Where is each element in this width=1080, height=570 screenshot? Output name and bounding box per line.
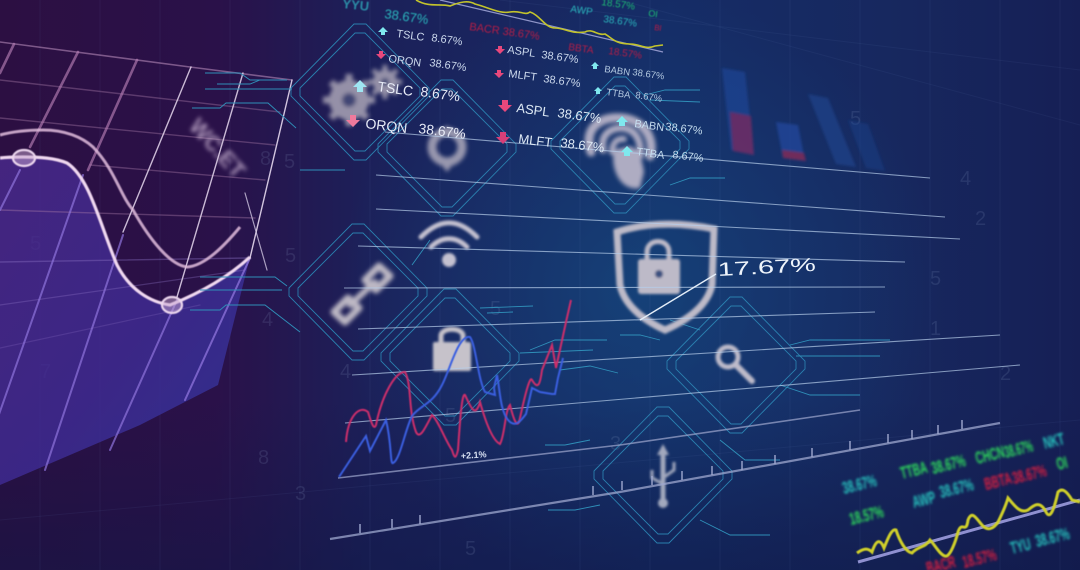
faint background digits: 5 xyxy=(445,405,456,427)
stock list: rear right rows: TTBA xyxy=(606,87,632,101)
stock list: foreground left xyxy=(346,78,467,142)
faint background digits: 1 xyxy=(930,318,941,340)
stock list: foreground left: 38.67% xyxy=(418,120,467,142)
faint background digits: 8 xyxy=(258,447,269,469)
stock list: top edge row: AWP xyxy=(570,4,594,18)
faint background digits: 4 xyxy=(262,309,273,331)
green tickers: OI xyxy=(1054,452,1069,474)
stock list: rear rows: TSLC xyxy=(396,28,425,44)
stock list: foreground centre xyxy=(496,100,606,155)
stock list: rear rows: ASPL xyxy=(507,44,536,60)
icon: magnifier xyxy=(718,347,752,381)
teal tickers: AWP xyxy=(910,487,937,512)
axis: lower white baseline with ticks xyxy=(330,410,1000,539)
teal tickers: 38.67% xyxy=(840,470,879,498)
stock list: rear rows: MLFT xyxy=(508,68,538,84)
chart grid lines xyxy=(0,42,292,470)
green tickers: CHCN xyxy=(973,442,1006,468)
faint background digits xyxy=(30,108,1011,560)
faint background digits: 4 xyxy=(960,168,971,190)
green tickers: TTBA xyxy=(898,457,929,483)
icon: padlock xyxy=(433,329,471,371)
faint background digits: 5 xyxy=(284,151,295,173)
green tickers: 38.67% xyxy=(929,450,968,478)
faint background digits: 7 xyxy=(40,361,51,383)
callout: 17.67%: 17.67% xyxy=(717,255,816,281)
stock list: foreground right: 38.67% xyxy=(665,121,703,138)
stock list: top edge row: BACR 38.67% xyxy=(469,21,541,43)
red tickers: BBTA xyxy=(982,468,1014,494)
faint background digits: 5 xyxy=(490,298,501,320)
stock list: rear right rows: BABN xyxy=(604,64,631,79)
ticker baseline and line chart xyxy=(857,490,1080,562)
stock list: rear right rows: 8.67% xyxy=(635,90,663,105)
icon: gears xyxy=(323,65,402,126)
icon: usb xyxy=(652,444,674,508)
stock list: rear rows: 38.67% xyxy=(541,49,579,66)
stock list: foreground right xyxy=(616,116,704,165)
teal tickers: 38.67% xyxy=(1033,523,1072,551)
stock list: top edge row: OI xyxy=(648,8,659,19)
faint background digits: 5 xyxy=(465,538,476,560)
top line chart xyxy=(416,0,663,52)
icon: shield lock xyxy=(617,224,714,330)
stock list: foreground right: TTBA xyxy=(636,146,666,162)
faint background digits: 5 xyxy=(850,108,861,130)
icon: refresh xyxy=(432,125,462,172)
faint background digits: 8 xyxy=(260,148,271,170)
line chart: red series xyxy=(346,300,571,457)
stock list: top edge row: BBTA xyxy=(568,42,595,57)
teal tickers xyxy=(840,429,1072,558)
icon: chain link xyxy=(334,266,390,322)
icon: wireless ear xyxy=(589,118,651,188)
callout: 17.67% xyxy=(640,255,816,320)
ticker: lower right xyxy=(840,429,1072,570)
faint background digits: 5 xyxy=(930,268,941,290)
green tickers: 18.57% xyxy=(847,501,886,529)
stock list: top edge row: Bl xyxy=(654,23,662,33)
chart point markers xyxy=(13,150,182,313)
stock list: foreground centre: 38.67% xyxy=(557,105,603,126)
chart annotation: +2.1% xyxy=(460,449,487,461)
faint background digits: 5 xyxy=(285,245,296,267)
green tickers: 38.67% xyxy=(1002,436,1035,462)
back curve xyxy=(0,130,240,267)
green tickers xyxy=(847,436,1069,529)
faint background digits: 4 xyxy=(340,361,351,383)
stock list: foreground centre: MLFT xyxy=(518,131,553,150)
front curve xyxy=(0,157,250,305)
circuit traces xyxy=(190,73,890,535)
faint background digits: 3 xyxy=(610,433,621,455)
stock list: rear rows: 8.67% xyxy=(431,32,463,48)
stock list: rear right rows: 38.67% xyxy=(632,67,666,83)
stock list: rear rows: 38.67% xyxy=(543,73,581,90)
icon: wifi xyxy=(421,223,477,267)
teal tickers: NKT xyxy=(1041,429,1067,453)
stock list: top edge row xyxy=(342,0,662,62)
stock list: top edge row: 38.67% xyxy=(384,6,430,27)
faint background digits: 2 xyxy=(1000,363,1011,385)
stock list: rear rows xyxy=(376,27,581,90)
line chart: blue series xyxy=(339,337,563,477)
stock list: rear rows: 38.67% xyxy=(429,57,467,74)
panel: left purple area chart xyxy=(0,42,292,485)
blurred chart label: WC.ET xyxy=(184,114,251,183)
stock list: foreground right: 8.67% xyxy=(672,149,704,165)
faint background digits: 5 xyxy=(30,233,41,255)
faint background digits: 3 xyxy=(295,483,306,505)
teal tickers: 38.67% xyxy=(937,474,976,502)
stock list: top edge row: 18.57% xyxy=(608,46,643,62)
stock list: foreground left: 8.67% xyxy=(420,83,461,104)
stock list: foreground centre: ASPL xyxy=(516,100,551,120)
stock list: foreground left: ORQN xyxy=(365,115,408,136)
circuit diamonds xyxy=(289,24,805,543)
stock list: rear right rows xyxy=(591,62,666,105)
stock list: foreground left: TSLC xyxy=(377,78,414,99)
stock list: foreground centre: 38.67% xyxy=(560,135,606,155)
teal tickers: TYU xyxy=(1008,534,1033,558)
stock list: foreground right: BABN xyxy=(634,118,665,134)
faint background digits: 2 xyxy=(975,208,986,230)
stock list: top edge row: 38.67% xyxy=(603,14,638,30)
bar chart: top right faint bars xyxy=(722,68,885,171)
stock list: rear rows: ORQN xyxy=(388,53,422,70)
red tickers xyxy=(924,460,1049,570)
chart area fill xyxy=(0,157,250,485)
perspective guide lines xyxy=(344,132,1020,423)
red tickers: 38.67% xyxy=(1010,460,1049,488)
